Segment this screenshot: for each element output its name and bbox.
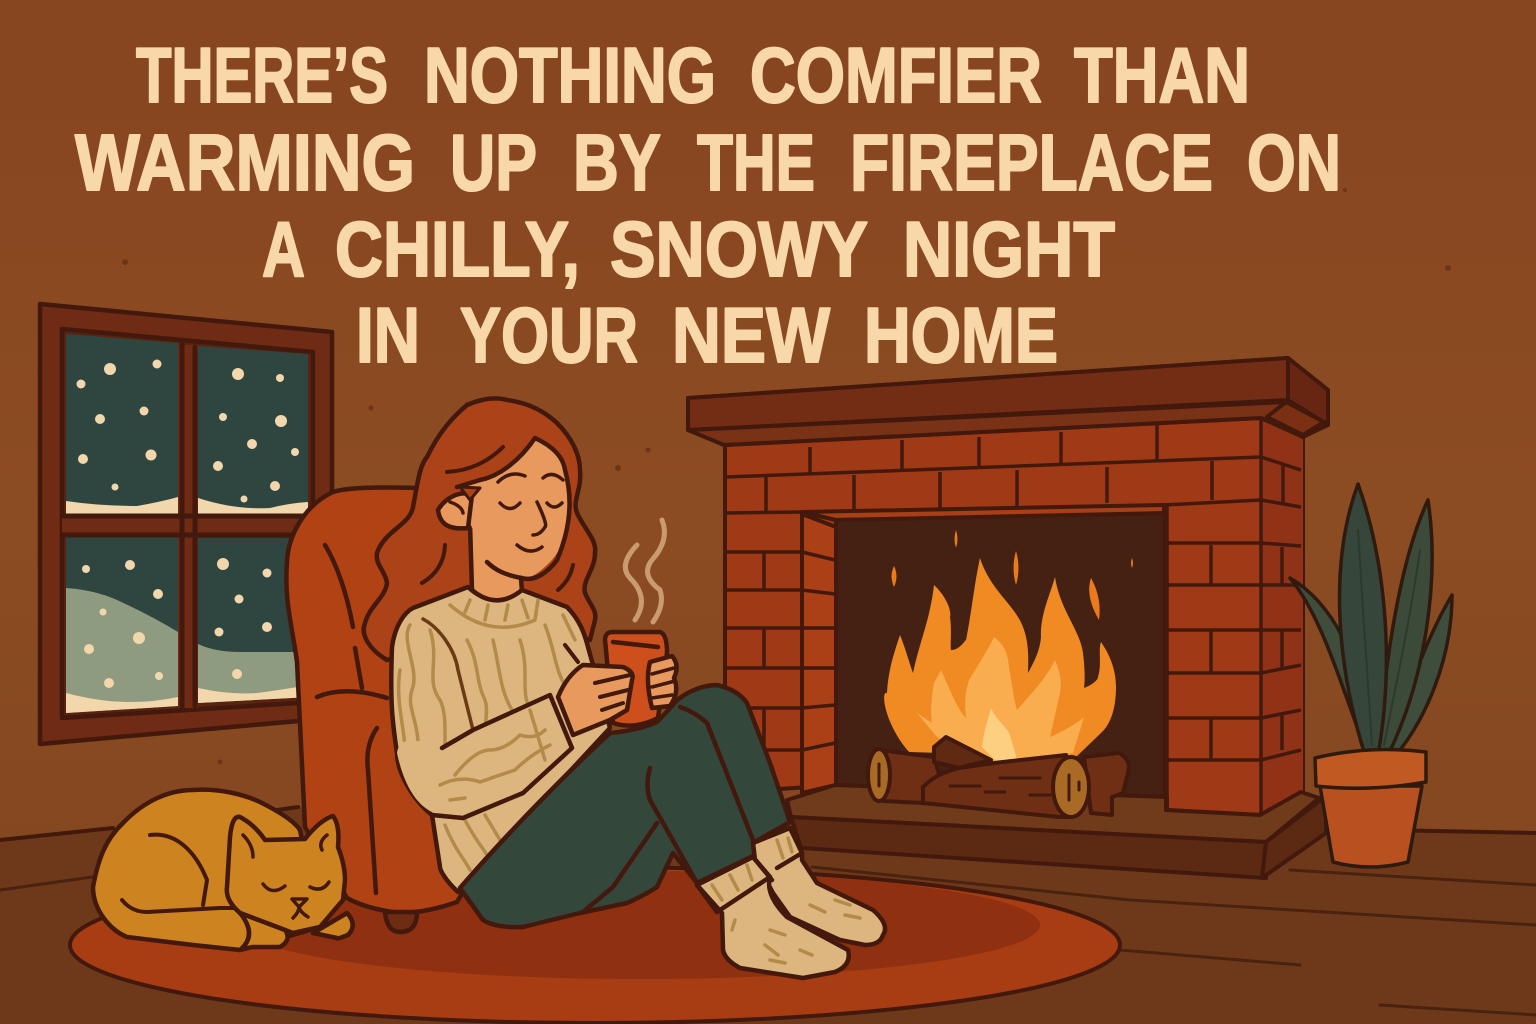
socks xyxy=(753,828,885,945)
window panes xyxy=(66,334,310,713)
mug xyxy=(605,632,667,726)
window muntins xyxy=(62,345,313,708)
title: BY xyxy=(573,118,661,207)
floor xyxy=(0,807,1536,1024)
brick courses xyxy=(726,420,1301,815)
hands xyxy=(558,665,633,735)
cat face xyxy=(243,835,329,918)
mantel xyxy=(688,358,1328,445)
title xyxy=(75,31,1341,379)
wall specks xyxy=(122,188,1451,764)
title: WARMING xyxy=(75,118,415,207)
title: IN xyxy=(356,291,420,379)
fireplace xyxy=(688,358,1328,878)
plant pot xyxy=(1320,786,1422,867)
sleeve xyxy=(397,695,572,819)
eyes brows nose mouth xyxy=(498,474,563,551)
window frame xyxy=(40,304,332,744)
flames xyxy=(884,530,1133,763)
rug xyxy=(70,867,1120,1023)
woman xyxy=(364,398,885,978)
title: FIREPLACE xyxy=(850,118,1213,207)
title: HOME xyxy=(864,291,1058,379)
armchair xyxy=(286,488,470,932)
sweater collar and knit xyxy=(399,600,575,870)
title: THE xyxy=(697,118,815,207)
cat paws xyxy=(313,913,353,939)
window snowflakes xyxy=(76,360,299,688)
title: NOTHING xyxy=(424,31,716,119)
plant xyxy=(1290,484,1452,867)
title: ON xyxy=(1247,118,1341,207)
title: SNOWY xyxy=(610,205,868,293)
ear xyxy=(438,493,472,528)
sweater xyxy=(391,587,610,892)
title: THERE’S xyxy=(136,31,388,119)
jeans xyxy=(460,685,790,927)
title: THAN xyxy=(1074,31,1250,119)
cat head xyxy=(227,816,345,933)
chair leg xyxy=(385,912,417,932)
cat xyxy=(93,790,353,950)
brick body xyxy=(725,418,1303,815)
hearth xyxy=(787,785,1319,842)
title: NEW xyxy=(672,291,830,379)
title: YOUR xyxy=(460,291,638,379)
neck xyxy=(470,523,522,601)
cat body xyxy=(93,790,320,950)
sparks xyxy=(892,530,1133,620)
title: UP xyxy=(450,118,537,207)
title: A xyxy=(262,205,305,293)
firebox xyxy=(802,505,1164,520)
mug steam xyxy=(625,520,664,622)
hair xyxy=(364,398,595,660)
window xyxy=(40,304,332,744)
window snow xyxy=(66,497,310,713)
title: CHILLY, xyxy=(335,205,580,293)
title: COMFIER xyxy=(750,31,1042,119)
logs xyxy=(868,737,1129,817)
face xyxy=(457,438,571,578)
cat haunch and tail xyxy=(122,835,257,912)
title: NIGHT xyxy=(903,205,1115,293)
